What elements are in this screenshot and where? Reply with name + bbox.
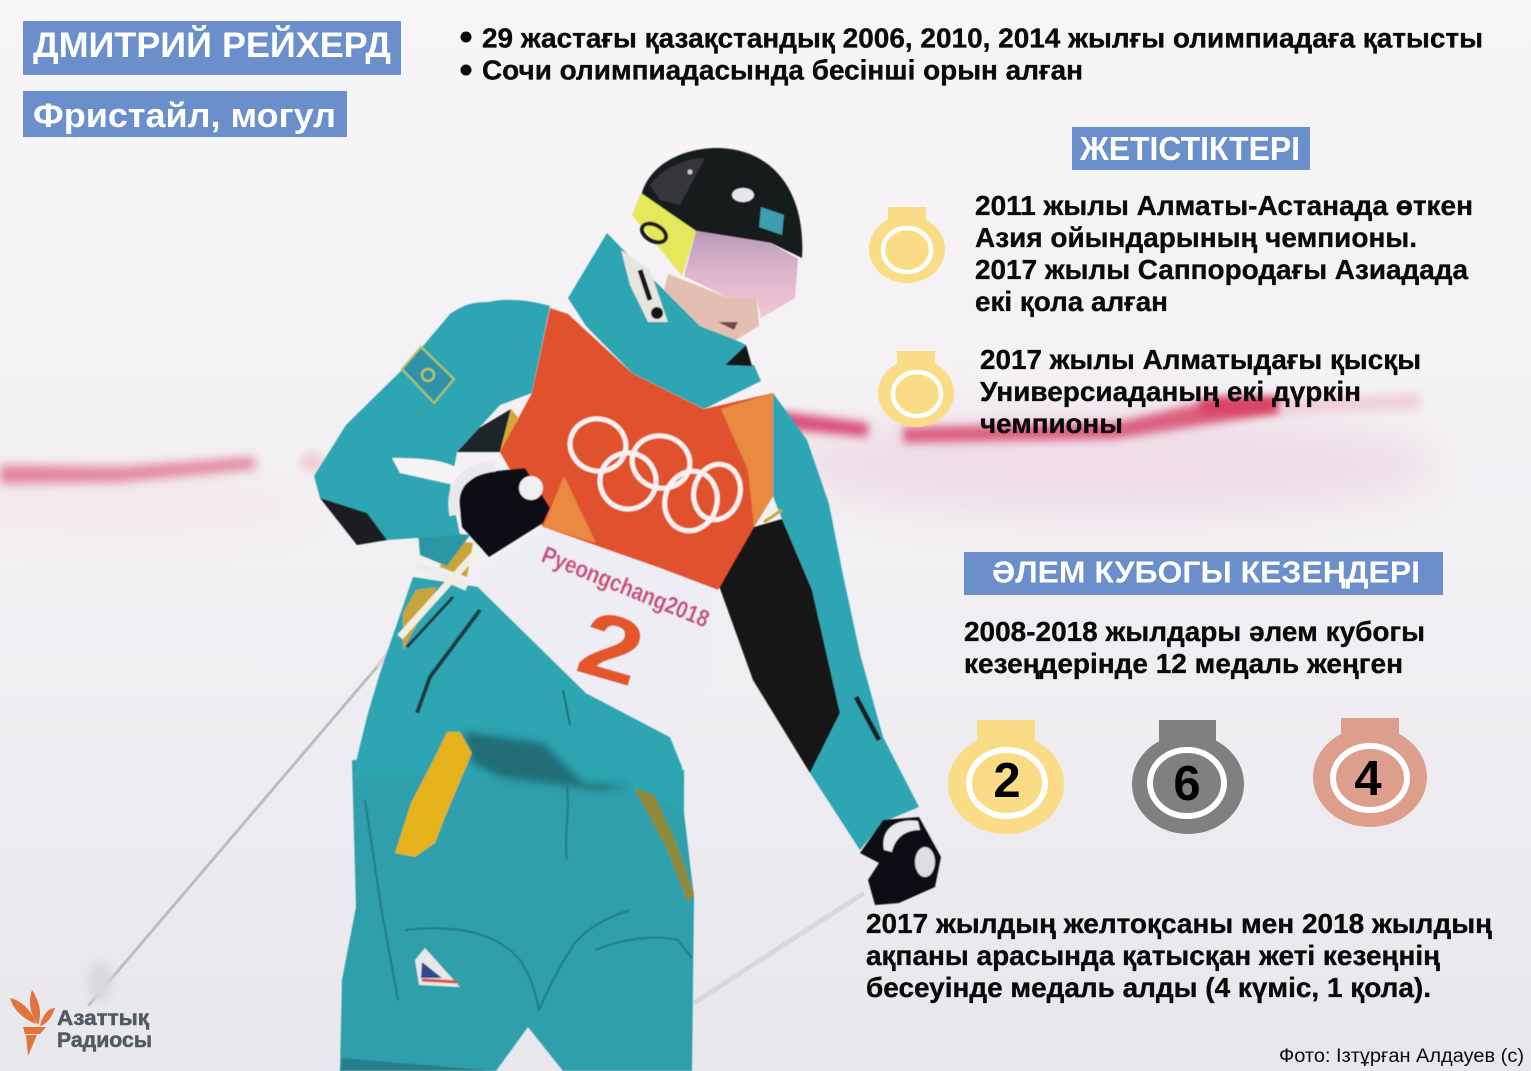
heading: athlete name: ДМИТРИЙ РЕЙХЕРД: [33, 25, 391, 65]
left glove: [458, 468, 550, 557]
bib text: Pyeongchang2018: [538, 542, 713, 633]
helmet flag: [759, 207, 784, 235]
icon: bronze medal count: [1313, 718, 1427, 827]
heading: discipline: Фристайл, могул: [33, 97, 336, 135]
logo: Azattyq Radiosy: Радиосы: [57, 1029, 152, 1052]
icon: gold medal 2: [878, 351, 954, 427]
bib white: [470, 527, 718, 737]
black underarm panel: [718, 519, 840, 773]
olympic rings: [564, 413, 746, 537]
jacket side trim: [440, 540, 473, 577]
text block: season results: [866, 908, 1492, 1003]
bib red: [500, 308, 773, 590]
hem strap: [417, 565, 467, 587]
text block: world cup summary: [964, 616, 1425, 679]
text block: achievement 1: Азия ойындарының чемпионы.: [975, 222, 1417, 253]
face: [664, 274, 759, 340]
icon: silver medal count: [1132, 720, 1244, 834]
yellow pants trim: [395, 732, 472, 857]
heading: athlete name: [23, 21, 401, 75]
logo text: Азаттық: [57, 1007, 150, 1030]
pants seams: [365, 787, 692, 1010]
goggle lens: [684, 231, 798, 318]
ski pole: left: [87, 637, 400, 1006]
right sleeve: [773, 393, 919, 850]
left arm: [314, 300, 550, 545]
text block: achievement 1: 2017 жылы Саппородағы Азиадада: [975, 254, 1469, 285]
icon: gold medal count: 2: [993, 754, 1021, 808]
helmet: [641, 148, 802, 258]
text block: achievement 1: [975, 190, 1473, 317]
text block: intro bullets: Сочи олимпиадасында бесінші орын алған: [482, 54, 1083, 86]
right glove: [860, 817, 941, 905]
text block: intro bullets: 29 жастағы қазақстандық 2006, 2010, 2014 жылғы олимпиадаға қатысты: [482, 22, 1483, 54]
text block: season results: 2017 жылдың желтоқсаны мен 2018 жылдың: [866, 908, 1492, 939]
icon: gold medal 1: [869, 207, 945, 283]
pants: [340, 760, 694, 1071]
icon: gold medal count: [948, 720, 1064, 834]
text block: achievement 2: 2017 жылы Алматыдағы қысқы: [980, 344, 1421, 375]
waist shadow: [464, 732, 630, 790]
team logo on pants: [415, 948, 460, 987]
text block: world cup summary: 2008-2018 жылдары әлем кубогы: [964, 616, 1425, 647]
ski pole: right: [694, 893, 864, 1003]
heading: achievements: ЖЕТІСТІКТЕРІ: [1079, 130, 1300, 167]
icon: bronze medal count: 4: [1354, 752, 1382, 806]
goggle strap: [632, 193, 696, 276]
collar lining: [621, 250, 668, 322]
pole over jacket: [407, 597, 453, 647]
text block: achievement 2: Универсиаданың екі дүркін: [980, 376, 1361, 407]
text block: achievement 1: 2011 жылы Алматы-Астанада өткен: [975, 190, 1473, 221]
text block: intro bullets: [460, 22, 1483, 86]
bib orange stripes: [721, 393, 773, 527]
heading: world cup stages: ӘЛЕМ КУБОГЫ КЕЗЕҢДЕРІ: [992, 554, 1420, 590]
text block: achievement 1: екі қола алған: [975, 286, 1168, 317]
text block: season results: бесеуінде медаль алды (4 күміс, 1 қола).: [866, 972, 1431, 1003]
bib number: 2: [568, 590, 655, 706]
hip and waist: [352, 577, 684, 813]
photo credit: Фото: Ізтұрған Алдауев (с): [1279, 1046, 1524, 1067]
text block: achievement 2: [980, 344, 1421, 439]
text block: world cup summary: кезеңдерінде 12 медаль жеңген: [964, 648, 1403, 679]
jacket zip: [417, 610, 480, 713]
flag patch on sleeve: [402, 347, 454, 403]
text block: achievement 2: чемпионы: [980, 408, 1123, 439]
neck gaiter and hood: [568, 233, 761, 409]
icon: torch: [10, 990, 55, 1056]
skier figure: [314, 148, 941, 1071]
logo: Azattyq Radiosy: [10, 990, 152, 1056]
icon: silver medal count: 6: [1173, 757, 1201, 811]
text block: season results: ақпаны арасында қатысқан жеті кезеңнің: [866, 940, 1440, 971]
dark shoulder gap: [457, 409, 511, 452]
